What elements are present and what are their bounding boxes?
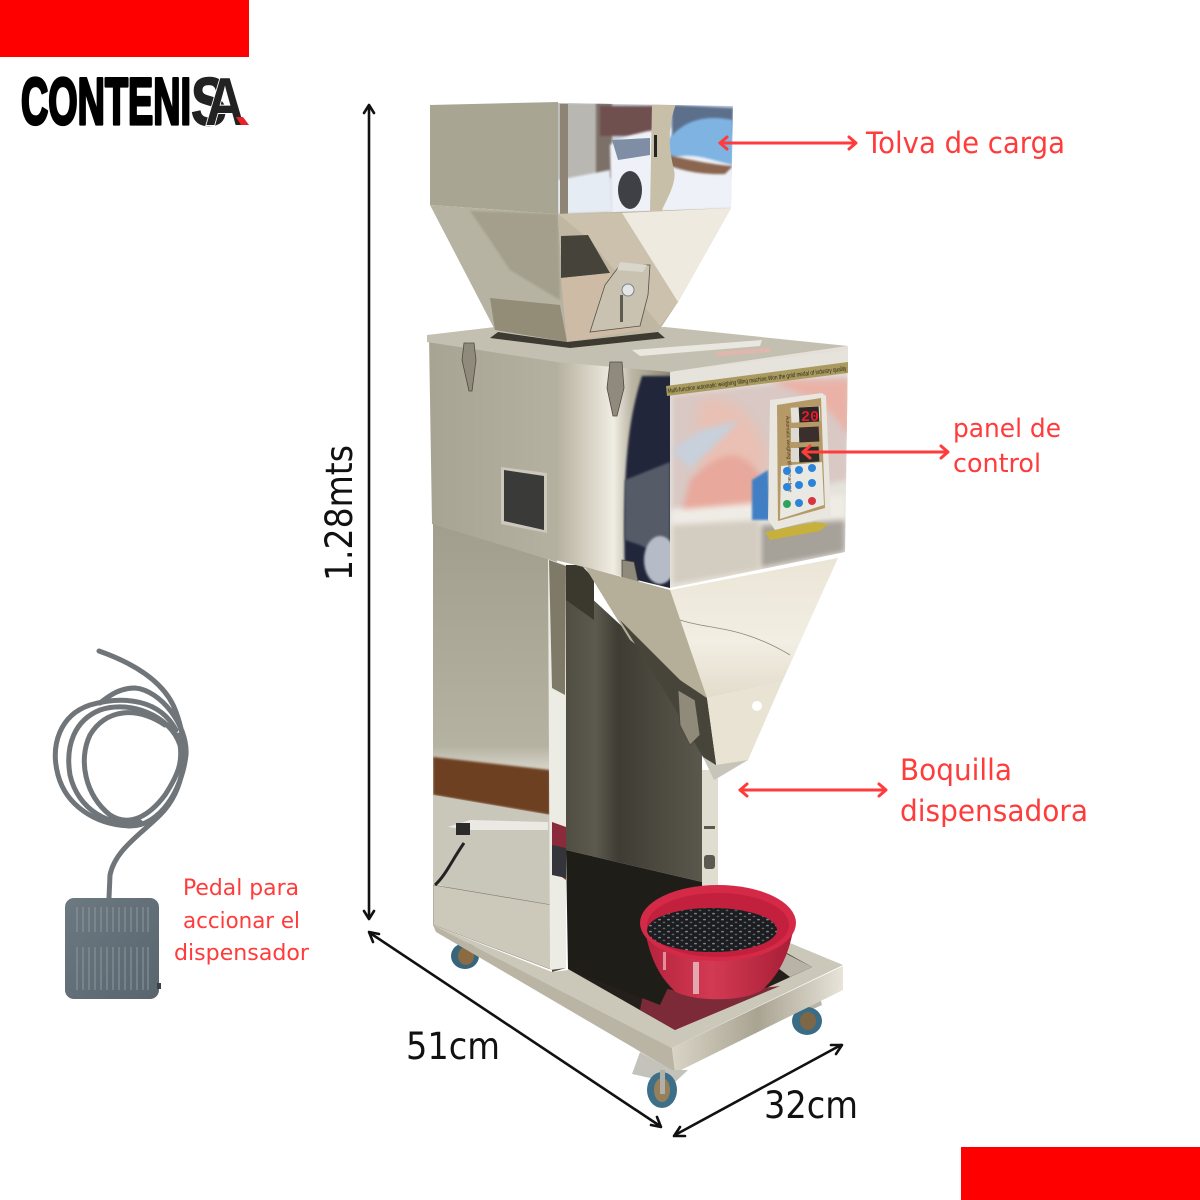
dimension arrow: depth [369,932,661,1127]
red bowl with beans [640,885,796,999]
width label: 32cm [764,1084,858,1127]
label: pedal: accionar el [183,909,300,934]
inspection window [501,467,547,533]
base plate [433,925,843,1073]
control panel [765,393,831,540]
upper body right face with reflections [670,350,850,588]
label: nozzle: dispensadora [900,794,1088,828]
bottom red bar [961,1147,1200,1200]
front caster wheel [632,1052,688,1108]
caster wheels, rear [451,943,822,1035]
height label: 1.28mts [318,445,361,581]
control panel: 20 [801,409,819,426]
label: pedal: Pedal para [183,876,299,901]
dimension arrow: width [674,1045,842,1136]
top face [427,327,848,372]
upper hopper mirrored face [558,103,733,215]
lower column left face [433,522,566,970]
machine: weighing and filling unit [427,102,850,1108]
interior back wall [550,560,702,972]
label: nozzle: Boquilla [900,753,1012,787]
dimension arrow: height [364,105,374,919]
logo: Contenisa: S [191,64,227,140]
strip slots [704,826,715,869]
lower discharge hopper [583,558,838,780]
top red bar [0,0,249,57]
label: pedal: dispensador [174,941,310,966]
label: hopper: Tolva de carga [865,126,1065,160]
foot pedal with cable [55,651,186,999]
pedal ribs [77,907,148,990]
right support strip [702,770,718,888]
upper hopper left face [430,102,558,214]
hopper cone [430,205,731,342]
label: control panel: control [953,449,1041,479]
arrow: nozzle [740,784,886,796]
arrow: hopper [720,137,856,149]
pedal body [65,898,159,999]
pedal cable [55,651,186,898]
logo: Contenisa: CONTENI [21,64,191,138]
depth label: 51cm [406,1025,500,1068]
label strip: machine name plate [666,362,848,396]
label strip: machine name plate: Multi-function automatic weighing filling machine.Won the gold medal of industry quality [667,365,847,395]
arrow: control panel [803,446,948,458]
logo: Contenisa: A [205,64,245,140]
label: control panel: panel de [953,414,1061,444]
latches [462,343,642,606]
upper body middle face [555,358,676,590]
pedal connector [157,983,161,989]
control panel: Automatic weighing filling machine [784,416,793,493]
upper body left face [429,336,557,562]
